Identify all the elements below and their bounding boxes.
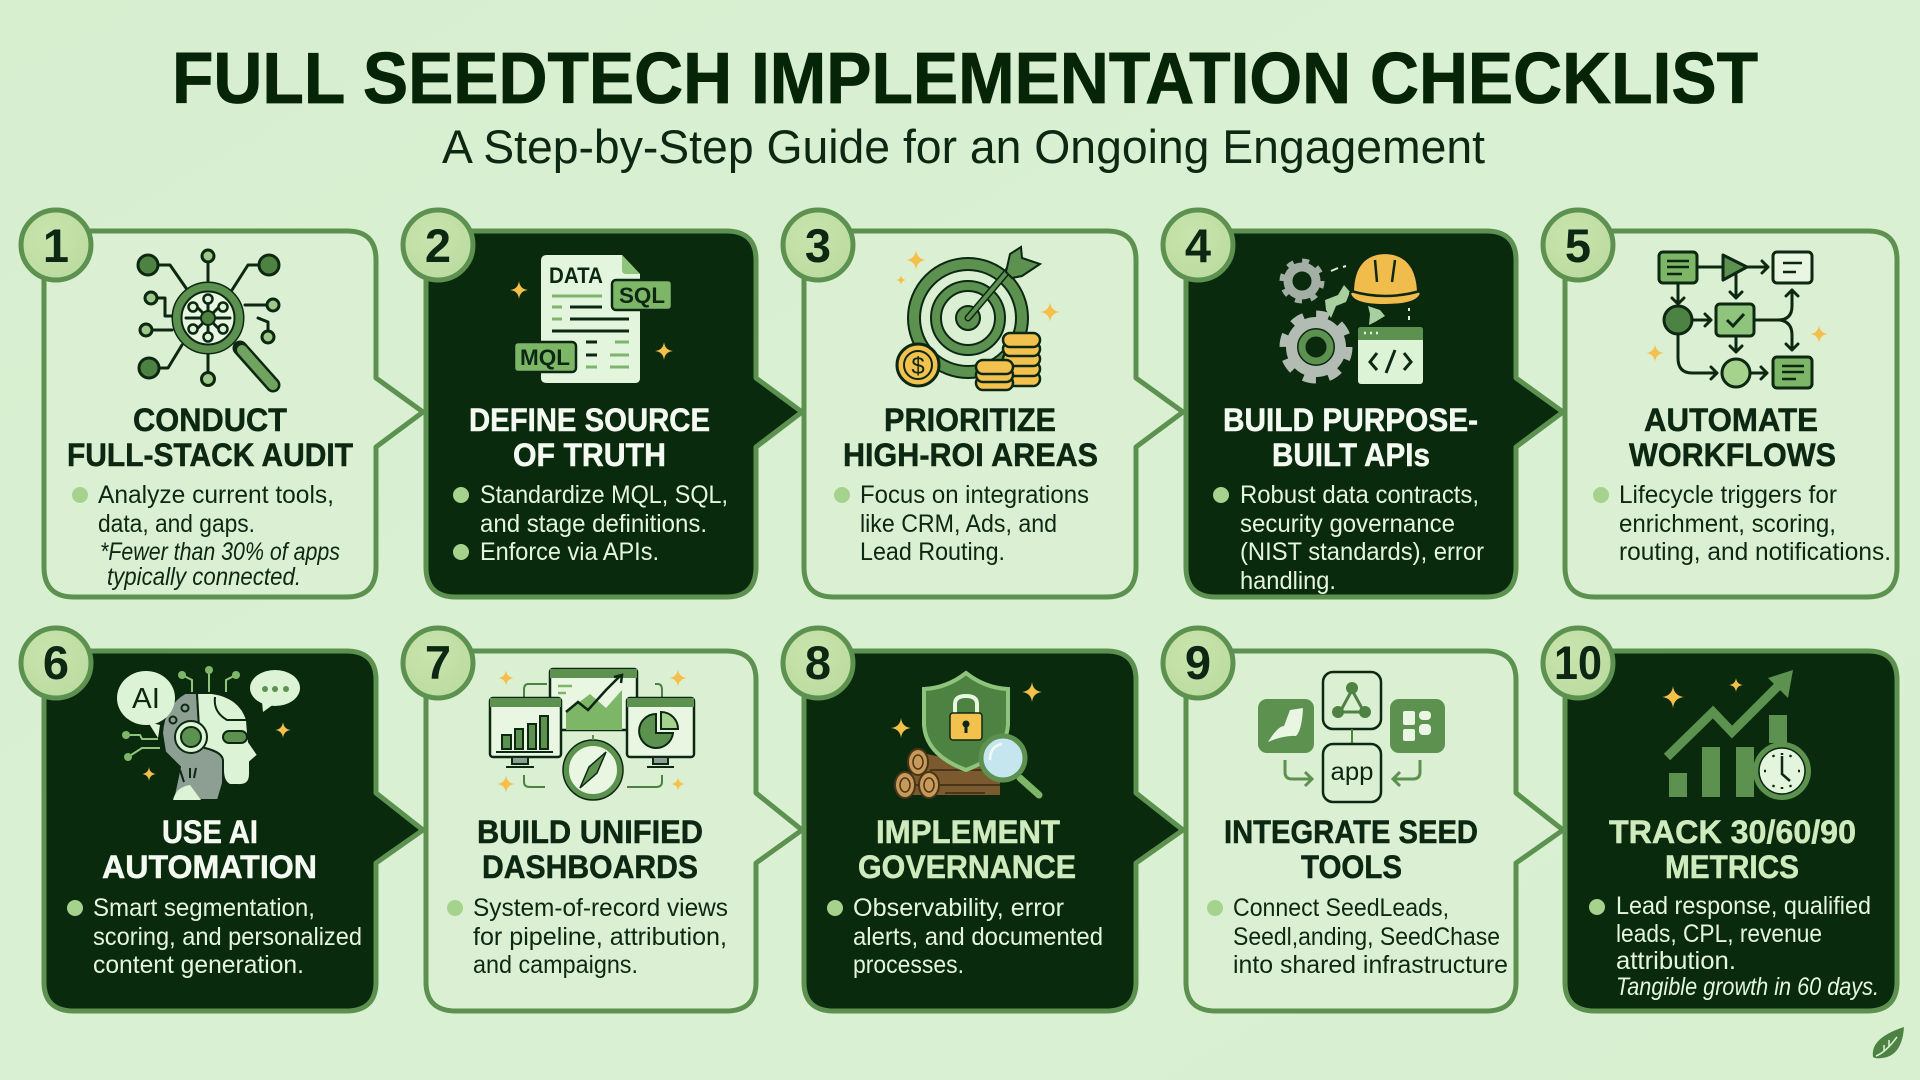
icon: gears hard hat and code window bbox=[1282, 253, 1423, 384]
bullet list: audit: data, and gaps. bbox=[98, 510, 255, 538]
heading: use ai automation bbox=[102, 814, 317, 885]
heading: implement governance: GOVERNANCE bbox=[858, 849, 1076, 885]
bullet list: governance: alerts, and documented bbox=[853, 923, 1103, 951]
heading: build purpose-built apis: BUILT APIs bbox=[1272, 437, 1430, 473]
bullet list: apis: security governance bbox=[1240, 510, 1455, 538]
bullet list: metrics: attribution. bbox=[1616, 947, 1736, 975]
heading: track 30/60/90 metrics bbox=[1609, 814, 1856, 885]
heading: conduct full-stack audit: CONDUCT bbox=[133, 402, 287, 438]
heading: define source of truth: DEFINE SOURCE bbox=[469, 402, 710, 438]
badge: step 7: 7 bbox=[425, 636, 451, 689]
bullet list: workflows: routing, and notifications. bbox=[1619, 538, 1891, 566]
bullet list: ai: Smart segmentation, bbox=[93, 894, 315, 922]
bullet list: source of truth bbox=[453, 481, 728, 566]
bullet list: source of truth: Standardize MQL, SQL, bbox=[480, 481, 728, 509]
icon: corner leaf logo bbox=[1873, 1027, 1904, 1058]
heading: conduct full-stack audit bbox=[67, 402, 353, 473]
bullet list: ai: scoring, and personalized bbox=[93, 923, 362, 951]
badge: step 8: 8 bbox=[805, 636, 831, 689]
heading: implement governance: IMPLEMENT bbox=[876, 814, 1060, 850]
bullet list: metrics: leads, CPL, revenue bbox=[1616, 920, 1822, 948]
bullet list: apis: Robust data contracts, bbox=[1240, 481, 1479, 509]
bullet list: roi: like CRM, Ads, and bbox=[860, 510, 1057, 538]
bullet list: seed tools bbox=[1207, 894, 1508, 979]
panel: step 10 track 30/60/90 metrics bbox=[1565, 651, 1897, 1011]
panel: step 7 build unified dashboards bbox=[426, 651, 802, 1011]
bullet list: seed tools: Connect SeedLeads, bbox=[1233, 894, 1449, 922]
icon: ai robot head bbox=[117, 666, 300, 800]
badge: step 2 bbox=[403, 210, 473, 280]
icon: data document: DATA bbox=[549, 263, 603, 288]
icon: data document: MQL bbox=[520, 345, 570, 370]
bullet list: governance bbox=[827, 894, 1103, 979]
heading: automate workflows: AUTOMATE bbox=[1644, 402, 1818, 438]
icon: dashboards and compass bbox=[490, 669, 694, 800]
heading: prioritize high-roi areas: HIGH-ROI AREAS bbox=[843, 437, 1098, 473]
badge: step 3 bbox=[783, 210, 853, 280]
icon: growth chart with clock bbox=[1662, 670, 1808, 797]
icon: data document bbox=[510, 255, 673, 383]
bullet list: governance: processes. bbox=[853, 951, 964, 979]
heading: conduct full-stack audit: FULL-STACK AUDIT bbox=[67, 437, 353, 473]
heading: use ai automation: USE AI bbox=[162, 814, 258, 850]
badge: step 6 bbox=[21, 628, 91, 698]
heading: build purpose-built apis: BUILD PURPOSE- bbox=[1223, 402, 1478, 438]
badge: step 10: 10 bbox=[1554, 636, 1602, 689]
icon: seed tools app integration: app bbox=[1330, 758, 1374, 786]
bullet list: metrics bbox=[1589, 892, 1879, 1001]
panel: step 5 automate workflows bbox=[1565, 231, 1897, 597]
icon: shield lock logs and magnifier bbox=[891, 673, 1042, 798]
bullet list: dashboards: and campaigns. bbox=[473, 951, 638, 979]
heading: prioritize high-roi areas bbox=[843, 402, 1098, 473]
icon: network audit magnifier bbox=[138, 250, 279, 386]
bullet list: dashboards bbox=[447, 894, 728, 979]
heading: build unified dashboards: BUILD UNIFIED bbox=[477, 814, 703, 850]
heading: integrate seed tools: TOOLS bbox=[1301, 849, 1402, 885]
badge: step 8 bbox=[783, 628, 853, 698]
badge: step 5 bbox=[1543, 210, 1613, 280]
bullet list: dashboards: System-of-record views bbox=[473, 894, 728, 922]
badge: step 4 bbox=[1163, 210, 1233, 280]
bullet list: apis: handling. bbox=[1240, 567, 1336, 595]
bullet list: seed tools: into shared infrastructure bbox=[1233, 951, 1508, 979]
badge: step 10 bbox=[1543, 628, 1613, 698]
heading: prioritize high-roi areas: PRIORITIZE bbox=[884, 402, 1056, 438]
panel: step 8 implement governance bbox=[804, 651, 1183, 1011]
heading: automate workflows: WORKFLOWS bbox=[1629, 437, 1836, 473]
bullet list: workflows bbox=[1593, 481, 1891, 566]
icon: target with coins: $ bbox=[911, 353, 925, 380]
heading: build purpose-built apis bbox=[1223, 402, 1478, 473]
bullet list: audit: typically connected. bbox=[107, 563, 301, 591]
bullet list: audit: *Fewer than 30% of apps bbox=[100, 538, 340, 566]
subtitle: A Step-by-Step Guide for an Ongoing Engagement bbox=[442, 120, 1485, 173]
panel: step 1 conduct full-stack audit bbox=[44, 231, 423, 597]
icon: seed tools app integration bbox=[1258, 672, 1445, 802]
bullet list: seed tools: Seedl,anding, SeedChase bbox=[1233, 923, 1500, 951]
bullet list: dashboards: for pipeline, attribution, bbox=[473, 923, 727, 951]
bullet list: audit: Analyze current tools, bbox=[98, 481, 334, 509]
icon: data document: SQL bbox=[619, 283, 665, 308]
bullet list: workflows: enrichment, scoring, bbox=[1619, 510, 1836, 538]
bullet list: apis: (NIST standards), error bbox=[1240, 538, 1484, 566]
heading: track 30/60/90 metrics: TRACK 30/60/90 bbox=[1609, 814, 1856, 850]
bullet list: source of truth: Enforce via APIs. bbox=[480, 538, 659, 566]
badge: step 7 bbox=[403, 628, 473, 698]
heading: automate workflows bbox=[1629, 402, 1836, 473]
bullet list: ai bbox=[67, 894, 362, 979]
title: FULL SEEDTECH IMPLEMENTATION CHECKLIST bbox=[172, 39, 1758, 119]
icon: ai robot head: AI bbox=[132, 683, 160, 715]
bullet list: roi: Focus on integrations bbox=[860, 481, 1089, 509]
heading: use ai automation: AUTOMATION bbox=[102, 849, 317, 885]
badge: step 9 bbox=[1163, 628, 1233, 698]
panel: step 6 use ai automation bbox=[44, 651, 423, 1011]
panel: step 4 build purpose-built apis bbox=[1186, 231, 1563, 597]
heading: track 30/60/90 metrics: METRICS bbox=[1665, 849, 1799, 885]
badge: step 6: 6 bbox=[43, 636, 69, 689]
heading: integrate seed tools bbox=[1224, 814, 1478, 885]
panel: step 9 integrate seed tools bbox=[1186, 651, 1563, 1011]
bullet list: roi bbox=[834, 481, 1089, 566]
bullet list: apis bbox=[1213, 481, 1484, 595]
bullet list: roi: Lead Routing. bbox=[860, 538, 1005, 566]
badge: step 5: 5 bbox=[1565, 219, 1591, 272]
badge: step 4: 4 bbox=[1185, 219, 1211, 272]
bullet list: metrics: Lead response, qualified bbox=[1616, 892, 1871, 920]
panel: step 2 define source of truth bbox=[426, 231, 802, 597]
heading: define source of truth: OF TRUTH bbox=[513, 437, 666, 473]
heading: build unified dashboards: DASHBOARDS bbox=[482, 849, 698, 885]
badge: step 1: 1 bbox=[43, 219, 69, 272]
heading: define source of truth bbox=[469, 402, 710, 473]
heading: implement governance bbox=[858, 814, 1076, 885]
bullet list: workflows: Lifecycle triggers for bbox=[1619, 481, 1837, 509]
badge: step 1 bbox=[21, 210, 91, 280]
bullet list: ai: content generation. bbox=[93, 951, 304, 979]
badge: step 2: 2 bbox=[425, 219, 451, 272]
icon: workflow diagram bbox=[1646, 252, 1828, 388]
bullet list: source of truth: and stage definitions. bbox=[480, 510, 707, 538]
heading: integrate seed tools: INTEGRATE SEED bbox=[1224, 814, 1478, 850]
bullet list: governance: Observability, error bbox=[853, 894, 1064, 922]
icon: target with coins bbox=[896, 247, 1060, 390]
bullet list: audit bbox=[72, 481, 340, 591]
badge: step 9: 9 bbox=[1185, 636, 1211, 689]
panel: step 3 prioritize high-roi areas bbox=[804, 231, 1183, 597]
heading: build unified dashboards bbox=[477, 814, 703, 885]
bullet list: metrics: Tangible growth in 60 days. bbox=[1616, 973, 1879, 1001]
badge: step 3: 3 bbox=[805, 219, 831, 272]
